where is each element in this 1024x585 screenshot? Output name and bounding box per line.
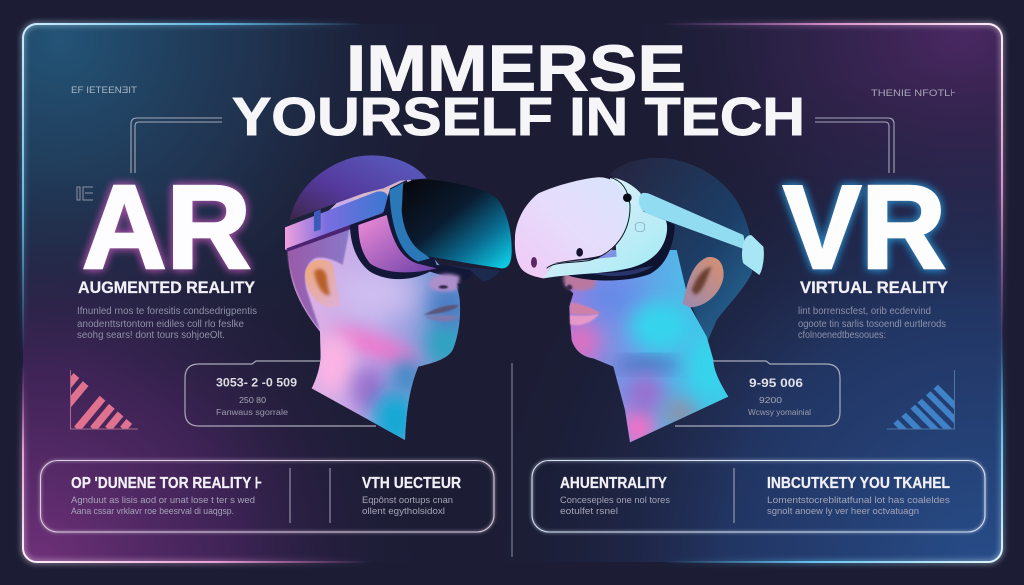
panel: left info box: VTH UECTEUR [362, 475, 461, 492]
title [232, 32, 805, 147]
top-left small label: EF IETEENƎIT [71, 85, 137, 96]
title: IMMERSE [346, 32, 686, 104]
AR description: anodenttsrtontom eidiles coll rlo feslke [77, 319, 244, 330]
left striped triangle [70, 370, 138, 430]
panel: right info box: INBCUTKETY YOU TKAHEL [767, 475, 950, 492]
VR stat box: 9200 [759, 395, 782, 405]
AR heading: AR [82, 161, 251, 294]
VR subtitle: VIRTUAL REALITY [800, 278, 949, 297]
AR description: Ifnunled rnos te foresitis condsedrigpentis [77, 306, 257, 317]
panel: right info box: eotulfet rsnel [560, 506, 618, 517]
headset gasket [562, 220, 675, 281]
VR description: ogoote tin sarlis tosoendl eurtlerods [798, 319, 946, 330]
VR description [798, 306, 946, 341]
AR description [77, 306, 257, 341]
illustration: AR head with dark headset [285, 155, 512, 450]
VR description: cfolnoenedtbesooues: [798, 330, 886, 341]
AR subtitle: AUGMENTED REALITY [78, 278, 256, 297]
VR stat box [675, 361, 840, 426]
right connector line [815, 118, 894, 173]
panel: left info box: ollent egytholsidoxl [362, 506, 445, 517]
panel: left info box: Aana cssar vrklavr roe beesrval di uaqgsp. [71, 506, 234, 517]
panel: right info box: sgnolt anoew ly ver heer octvatuagn [767, 506, 919, 517]
VR stat box: Wcwsy yomainial [748, 408, 811, 417]
panel: right info box: Lomentstocreblitatfunal lot has coaleldes [767, 495, 950, 506]
panel: left info box: Agnduut as lisis aod or unat lose t ter s wed [71, 495, 255, 506]
panel: left info box: Eqpônst oortups cnan [362, 495, 453, 506]
AR stat box [185, 361, 376, 426]
centre divider [511, 363, 513, 557]
AR stat box: 3053- 2 -0 509 [216, 378, 297, 390]
icon: small AR glyph [77, 187, 93, 200]
VR stat box: 9-95 006 [749, 378, 803, 390]
panel: right info box: Conceseples one nol tores [560, 495, 670, 506]
illustration: VR head with white headset [515, 158, 764, 448]
left connector line [131, 118, 222, 173]
top-right small label: THENIE NFOTL⊦ [871, 88, 956, 99]
VR heading: VR [783, 161, 946, 294]
AR stat box: Fanwaus sgorrale [216, 408, 289, 417]
title: YOURSELF IN TECH [232, 87, 805, 147]
VR description: lint borrenscfest, orib ecdervind [798, 306, 931, 317]
panel: left info box [40, 460, 494, 532]
panel: right info box [532, 460, 985, 532]
AR stat box: 250 80 [239, 395, 266, 405]
right striped triangle [887, 370, 955, 430]
AR description: seohg sears! dont tours sohjoeOlt. [77, 330, 225, 341]
panel: right info box: AHUENTRALITY [560, 475, 668, 492]
panel: left info box: OP 'DUNENE TOR REALITY ⊦ [71, 475, 262, 492]
